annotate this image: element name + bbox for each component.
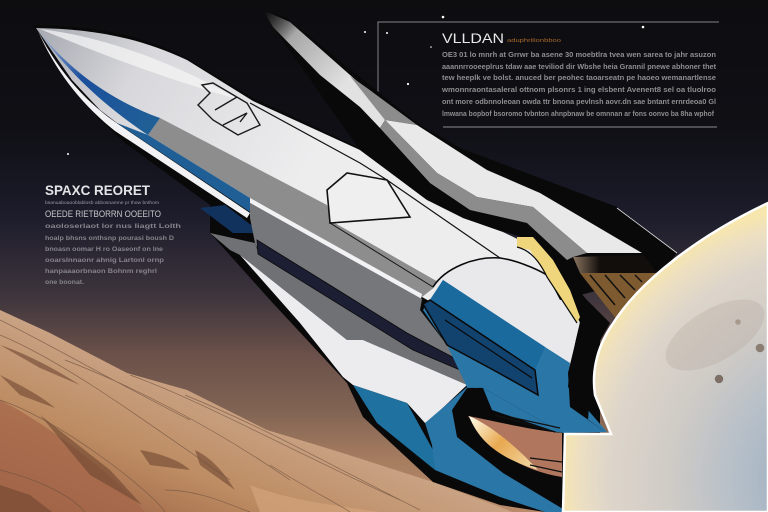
heading: Vulcan: VLLDAN	[442, 31, 504, 46]
sub-heading: orange tag: aduphrilionbboo	[507, 38, 561, 44]
body text: OE3 01 lo mnrh at Grrwr ba asene 30 moebtlra tvea wen sarea to jahr asuzon	[442, 50, 716, 59]
gold contour line	[517, 247, 577, 323]
wing root band	[573, 255, 657, 273]
hull lower blue strip	[117, 123, 250, 212]
moon: large cratered body	[563, 203, 768, 512]
body text: hanpaaaorbnaon Bohnm reghrl	[45, 268, 157, 275]
fin blue corner	[353, 385, 435, 470]
body: nose and upper hull	[36, 28, 578, 380]
copper hatch	[580, 273, 657, 320]
hull: dark lower section	[250, 203, 513, 382]
heading: Space rocket: SPAXC REORET	[45, 182, 150, 198]
body text: one boonat.	[45, 279, 84, 286]
body text: oaoloserlaot lor nus liagtt Lolth	[45, 223, 181, 230]
hull: line in grey band	[330, 223, 433, 287]
gold glow	[517, 237, 580, 323]
panel: Vulcan text box	[378, 22, 719, 127]
nose blue panel	[40, 33, 160, 135]
emblem: top shield outline	[198, 83, 260, 135]
hull white stripes	[38, 31, 422, 299]
engine nozzle and flame	[425, 387, 563, 512]
body text	[45, 223, 181, 286]
hull navy band	[257, 240, 510, 381]
wing edge highlight	[617, 208, 677, 253]
lower fin: white panel	[240, 255, 467, 423]
nose cone highlight	[40, 29, 240, 100]
body text: aaannrrooeeplrus tdaw aae teviliod dir Wbshe heia Grannil pnewe abhoner thet	[442, 62, 717, 71]
body text: tew heeplk ve bolst. anuced ber peohec taoarseatn pe haoeo wemanartlense	[442, 73, 716, 82]
panel: Space rocket text	[45, 182, 181, 286]
black outline of hull	[33, 25, 600, 512]
wing: upper fin, black backing	[263, 10, 677, 300]
wing: lower grey stripe	[380, 120, 587, 260]
body text	[441, 50, 717, 118]
caption line: bsanuaboaooblablosb abbosnamne pr thow bnthom	[45, 200, 159, 206]
lower fin: grey skin	[210, 233, 510, 386]
wing: top grey edge	[350, 76, 417, 125]
body text: bnoasn oomar H ro Oaseonf on lne	[45, 246, 163, 253]
shadow under nose	[200, 205, 255, 233]
body text: hoalp bhsns onthsnp pourasi boush D	[45, 235, 174, 242]
body text: wmonnraontasaleral ottnom plsonrs 1 ing elsbent Avenent8 sel oa tluolroo	[441, 85, 716, 94]
hull: grey shadow band	[148, 118, 440, 297]
wing: exhaust streak	[263, 10, 385, 128]
black contour by wing root	[430, 195, 610, 433]
stars	[67, 16, 644, 155]
body text: ooarslnnaonr ahnig Lartonl ornp	[45, 257, 164, 264]
engine pod: blue nacelle	[423, 258, 607, 433]
terrain: desert ridge	[0, 310, 512, 512]
body text: ont more odbnnoleoan owda ttr bnona pevlnsh aovr.dn sae bntant ernrdeoa0 Gl	[442, 97, 716, 106]
sub-heading: OEEDE RIETBORRN OOEEITO	[45, 209, 161, 220]
emblem: lower hatch outline	[327, 173, 410, 223]
top hull contour line	[250, 103, 500, 258]
wing: white panel	[385, 120, 642, 253]
body text: lmwana bopbof bsoromo tvbnton ahnpbnaw be omnnan ar fons oonvo ba 8ha wphof	[442, 109, 714, 118]
